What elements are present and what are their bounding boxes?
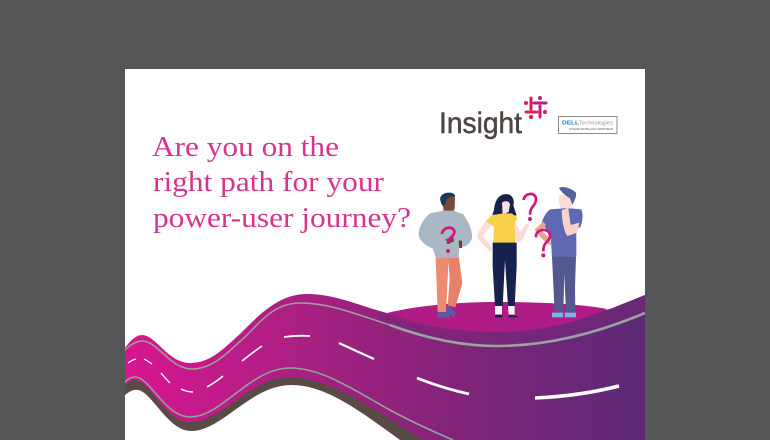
infographic cover (125, 69, 645, 440)
person middle (477, 194, 529, 317)
title: Are you on the (152, 131, 339, 163)
white panel (125, 69, 645, 440)
title: power-user journey? (153, 202, 411, 234)
road illustration (125, 294, 645, 440)
Dell Technologies badge (558, 116, 617, 134)
person left (419, 193, 472, 318)
bottom road edge line (125, 368, 453, 440)
Dell Technologies badge: Technologies (579, 120, 613, 126)
Dell Technologies badge: DELL (562, 120, 580, 126)
road shadow (125, 377, 423, 440)
people (419, 187, 583, 318)
person right (535, 187, 583, 317)
logo mark (524, 96, 547, 119)
road far band (380, 295, 645, 338)
title: right path for your (153, 166, 384, 198)
Dell Technologies badge: TITANIUM BLACK PARTNER (569, 127, 613, 131)
question mark middle (524, 194, 536, 221)
top road edge line (125, 303, 645, 369)
lane dashes (128, 336, 619, 398)
road surface (125, 294, 645, 440)
question mark left (442, 228, 454, 253)
logo wordmark: Insight (439, 107, 522, 140)
platform (387, 302, 607, 332)
title (152, 131, 411, 234)
Insight logo (439, 96, 547, 140)
question mark right (536, 230, 550, 257)
